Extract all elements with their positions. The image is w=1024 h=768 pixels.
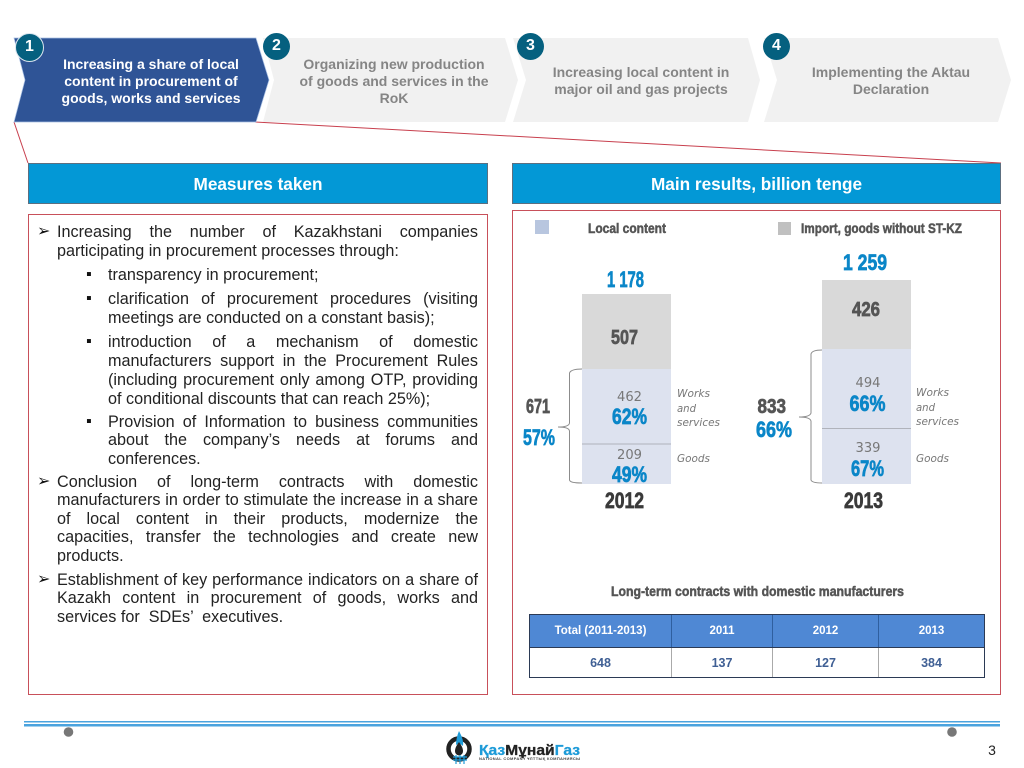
panel: measures list — [28, 214, 488, 695]
bar 2013: 494 — [856, 376, 880, 391]
value: 2011 — [672, 648, 773, 677]
measure 1 continuation: participating in procurement processes through: — [57, 242, 399, 260]
header: total: Total (2011-2013) — [555, 625, 646, 637]
value: 2012: 127 — [815, 656, 836, 670]
sub-item: mechanism line 4: of conditional discounts that can reach 25%); — [108, 390, 430, 408]
measure 3 line 3: services for SDEs’ executives. — [57, 608, 283, 626]
measure 3 line 2: Kazakh content in procurement of goods, works and — [57, 589, 478, 607]
value: 2013: 384 — [921, 656, 942, 670]
step 1 text: Increasing a share of local content in procurement of goods, works and services — [62, 56, 240, 106]
sub-item: mechanism line 3: (including procurement only among OTP, providing — [108, 371, 478, 389]
panel: main results — [512, 210, 1001, 695]
measure 1 text: Increasing the number of Kazakhstani companies — [57, 223, 478, 241]
bar 2013: Goods — [916, 452, 949, 465]
value: 2012 — [773, 648, 879, 677]
bar 2012: and — [677, 402, 697, 415]
heading: main results: Main results, billion tenge — [651, 174, 862, 194]
step number 1: 1 — [25, 38, 34, 55]
step number 1 — [15, 33, 44, 62]
bar 2012: 62% — [612, 404, 647, 429]
measure 2 line 3: of local content in their products, modernize the — [57, 510, 478, 528]
bar 2013: and — [916, 401, 936, 414]
step number 3: 3 — [526, 37, 535, 54]
measure 2 text: Conclusion of long-term contracts with domestic — [57, 473, 478, 491]
bar 2013: 426 — [852, 299, 880, 321]
bar 2012: 671 — [526, 396, 550, 418]
legend: local content: Local content — [588, 220, 666, 236]
page number: 3 — [988, 742, 996, 758]
table values row — [530, 647, 984, 677]
heading: measures taken: Measures taken — [194, 174, 322, 194]
step number 2: 2 — [272, 37, 281, 54]
sub-item: clarification: clarification of procurement procedures (visiting — [108, 290, 478, 308]
heading: measures taken — [28, 163, 488, 204]
step number 3 — [517, 33, 544, 60]
sub-item: information line 2: about the company’s needs at forums and — [108, 431, 478, 449]
legend: local content — [535, 220, 666, 236]
bar 2012: 2012 — [605, 488, 644, 513]
company logo — [446, 731, 580, 764]
bar 2012 — [523, 267, 720, 513]
chevron shapes — [14, 38, 1011, 122]
bar 2013: services — [916, 415, 959, 428]
bullet arrow: ➢ — [37, 223, 50, 240]
value: total — [530, 648, 672, 677]
step number 4: 4 — [772, 37, 781, 54]
header: 2012: 2012 — [813, 625, 838, 637]
sub-item: mechanism line 2: manufacturers support in the Procurement Rules — [108, 352, 478, 370]
bar 2013: 833 — [758, 396, 786, 418]
bar 2012: Goods — [677, 452, 710, 465]
bar 2012: 209 — [617, 448, 642, 463]
footer rules and dots — [24, 721, 1000, 737]
bullet arrow: ➢ — [37, 571, 50, 588]
logo subtitle: NATIONAL COMPANY ҰЛТТЫҚ КОМПАНИЯСЫ — [479, 756, 580, 761]
header: 2011 — [672, 615, 773, 647]
header: 2013: 2013 — [919, 625, 944, 637]
sub-item: mechanism: introduction of a mechanism of domestic — [108, 333, 478, 351]
legend: import: Import, goods without ST-KZ — [801, 220, 962, 236]
measure 2 line 2: manufacturers in order to stimulate the increase in a share — [57, 491, 478, 509]
sub-item: information line 3: conferences. — [108, 450, 201, 468]
bar 2013: 66% — [850, 391, 886, 416]
bar 2013: 67% — [851, 456, 884, 481]
heading: main results — [512, 163, 1001, 204]
header: 2011: 2011 — [710, 625, 734, 637]
value: total: 648 — [590, 656, 611, 670]
contracts table — [529, 614, 985, 678]
bar 2013: 2013 — [844, 488, 883, 513]
sub-item: information: Provision of Information to business communities — [108, 413, 478, 431]
bar 2013: 339 — [856, 441, 880, 456]
bar 2013: Works — [916, 386, 949, 399]
table title: Long-term contracts with domestic manufacturers — [611, 583, 904, 599]
connector lines from step 1 to panels — [14, 122, 1001, 164]
header: 2012 — [773, 615, 879, 647]
stacked bar charts — [523, 220, 962, 600]
measure 2 line 5: products. — [57, 547, 124, 565]
bar 2013: 1 259 — [843, 250, 887, 275]
step 2 text: Organizing new production of goods and services in the RoK — [299, 56, 489, 106]
bar 2012: services — [677, 416, 720, 429]
measure 3 text: Establishment of key performance indicators on a share of — [57, 571, 478, 589]
sub-item: transparency: transparency in procurement; — [108, 266, 319, 284]
bar 2013 — [756, 250, 959, 513]
header: total — [530, 615, 672, 647]
bar 2012: 462 — [617, 390, 642, 405]
sub-bullet: ▪ — [86, 290, 92, 307]
bullet arrow: ➢ — [37, 473, 50, 490]
step number 4 — [763, 33, 790, 60]
measure 2 line 4: capacities, transfer the technologies and create new — [57, 528, 478, 546]
logo emblem — [448, 731, 470, 764]
bar 2012: 49% — [612, 462, 647, 487]
bar 2012: Works — [677, 387, 710, 400]
step 3 text: Increasing local content in major oil and gas projects — [553, 64, 729, 97]
bar 2013: 66% — [756, 417, 792, 442]
step 4 text: Implementing the Aktau Declaration — [812, 64, 970, 97]
bar 2012: 507 — [611, 327, 638, 349]
table header row — [530, 615, 984, 647]
value: 2011: 137 — [712, 656, 732, 670]
logo wordmark: ҚазМұнайГаз — [479, 742, 580, 759]
bar 2012: 57% — [523, 425, 555, 450]
sub-bullet: ▪ — [86, 266, 92, 283]
bar 2012: 1 178 — [607, 267, 644, 292]
sub-bullet: ▪ — [86, 413, 92, 430]
sub-bullet: ▪ — [86, 333, 92, 350]
step number 2 — [263, 33, 290, 60]
sub-item: clarification continuation: meetings are conducted on a constant basis); — [108, 309, 435, 327]
step navigation chevrons — [14, 33, 1011, 122]
